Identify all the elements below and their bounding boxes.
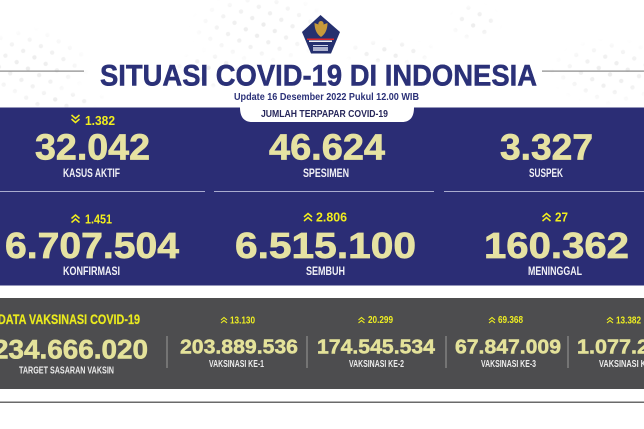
panel: data vaksinasi <box>0 298 644 389</box>
header rule right <box>542 70 644 72</box>
stat: sembuh: 2.806 <box>316 210 347 224</box>
logo: Satgas emblem <box>302 15 340 54</box>
stat: spesimen: 46.624 <box>269 126 385 168</box>
panel: jumlah terpapar <box>0 108 644 286</box>
stat: vaksinasi ke-2: 174.545.534 <box>317 336 436 358</box>
stat: konfirmasi: 1.451 <box>85 212 112 226</box>
header rule left <box>0 70 84 72</box>
stat: kasus aktif <box>35 113 150 180</box>
panel heading: DATA VAKSINASI COVID-19 <box>0 312 140 327</box>
stat: sembuh: 6.515.100 <box>235 225 416 266</box>
stat: vaksinasi ke-2 <box>317 314 436 370</box>
stat: target sasaran vaksin: TARGET SASARAN VAKSIN <box>19 364 114 376</box>
stat: meninggal: 160.362 <box>484 225 629 266</box>
stat: suspek: SUSPEK <box>529 168 563 180</box>
stat: vaksinasi ke-1: VAKSINASI KE-1 <box>209 358 264 370</box>
stat: kasus aktif: KASUS AKTIF <box>63 168 120 180</box>
stat: vaksinasi ke-3 <box>455 314 561 370</box>
title: SITUASI COVID-19 DI INDONESIA <box>100 60 537 92</box>
tab heading: JUMLAH TERPAPAR COVID-19 <box>261 109 388 120</box>
stat: sembuh: SEMBUH <box>306 266 345 278</box>
stat: vaksinasi cropped at right edge <box>577 314 644 370</box>
stat: konfirmasi: 6.707.504 <box>5 225 179 266</box>
panel background <box>0 298 644 389</box>
stat: meninggal <box>484 210 629 278</box>
stat: vaksinasi ke-3: 69.368 <box>498 314 523 326</box>
stat: vaksinasi cropped at right edge: 1.077.2 <box>577 336 644 358</box>
stat: kasus aktif: 1.382 <box>85 113 115 128</box>
stat: target sasaran vaksin <box>0 334 148 376</box>
stat: meninggal: MENINGGAL <box>528 266 582 278</box>
stat: spesimen: SPESIMEN <box>303 168 349 180</box>
stat: sembuh <box>235 210 416 278</box>
stat: vaksinasi ke-3: 67.847.009 <box>455 336 561 358</box>
stat: meninggal: 27 <box>555 210 568 224</box>
stat: vaksinasi ke-2: VAKSINASI KE-2 <box>349 358 404 370</box>
panel background <box>0 108 644 286</box>
stat: suspek: 3.327 <box>500 126 593 168</box>
update date: Update 16 Desember 2022 Pukul 12.00 WIB <box>234 91 419 103</box>
stat: vaksinasi ke-3: VAKSINASI KE-3 <box>481 358 536 370</box>
stat: kasus aktif: 32.042 <box>35 126 150 168</box>
stat: vaksinasi ke-1: 203.889.536 <box>180 336 298 358</box>
stat: konfirmasi: KONFIRMASI <box>63 266 120 278</box>
footer rule <box>0 402 644 403</box>
stat: vaksinasi ke-1 <box>180 314 298 370</box>
stat: vaksinasi ke-2: 20.299 <box>368 314 393 326</box>
stat: vaksinasi ke-1: 13.130 <box>230 314 255 326</box>
background halftone dots <box>0 0 644 108</box>
tab heading <box>240 108 414 122</box>
stat: konfirmasi <box>5 212 179 278</box>
